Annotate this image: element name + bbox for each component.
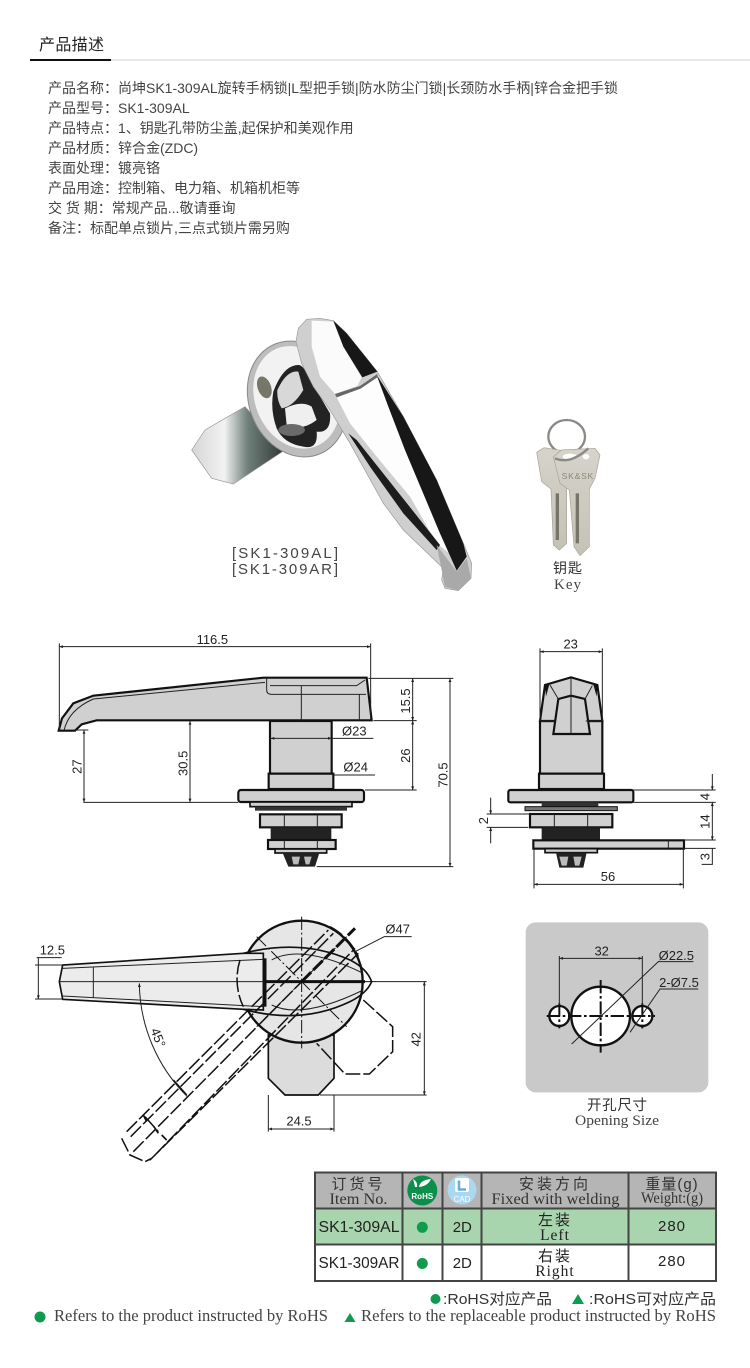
- product specification text block: 产品特点：1、钥匙孔带防尘盖,起保护和美观作用: [48, 120, 354, 136]
- icon: RoHS badge: [407, 1176, 437, 1206]
- opening size caption: [575, 1097, 659, 1129]
- product specification text block: 备注：标配单点锁片,三点式锁片需另购: [48, 220, 290, 236]
- table header labels: Weight:(g): [641, 1190, 703, 1207]
- panel: opening size diagram: 2-Ø7.5: [659, 975, 699, 990]
- table header labels: Item No.: [330, 1191, 388, 1208]
- photo: keys on ring: [537, 420, 600, 556]
- table row: SK1-309AL: [318, 1212, 686, 1244]
- icon: RoHS badge: RoHS: [411, 1192, 434, 1201]
- drawing: side view with dimensions: 14: [697, 814, 712, 829]
- drawing: front view with dimensions: 30.5: [175, 751, 190, 776]
- product specification text block: 产品材质：锌合金(ZDC): [48, 140, 198, 156]
- table row: SK1-309AR: 2D: [453, 1255, 472, 1272]
- drawing: top view with 45 degree rotation: 42: [409, 1032, 424, 1047]
- table header labels: 重量(g): [645, 1176, 699, 1193]
- table row: SK1-309AL: 280: [658, 1218, 686, 1235]
- drawing: top view with 45 degree rotation: [35, 917, 427, 1162]
- legend: RoHS symbols in English: Refers to the replaceable product instructed by RoHS: [361, 1306, 716, 1325]
- table: order information: [315, 1172, 716, 1281]
- opening size caption: Opening Size: [575, 1113, 659, 1129]
- drawing: side view with dimensions: 3: [697, 853, 712, 860]
- drawing: top view with 45 degree rotation: 45°: [148, 1026, 169, 1050]
- product specification text block: 表面处理：镀亮铬: [48, 160, 160, 176]
- legend: RoHS symbols in Chinese: [430, 1290, 716, 1308]
- table row: SK1-309AR: 右装: [538, 1248, 572, 1265]
- legend: RoHS symbols in English: Refers to the product instructed by RoHS: [54, 1306, 328, 1325]
- panel: opening size diagram: [526, 922, 708, 1092]
- photo: keys on ring: SK&SK: [562, 471, 594, 481]
- panel: opening size diagram: Ø22.5: [659, 948, 694, 963]
- drawing: front view with dimensions: 27: [69, 759, 84, 774]
- drawing: top view with 45 degree rotation: Ø47: [385, 922, 410, 937]
- drawing: side view with dimensions: 56: [601, 869, 615, 884]
- drawing: top view with 45 degree rotation: 24.5: [286, 1114, 312, 1129]
- drawing: front view with dimensions: [59, 632, 453, 867]
- product specification text block: 产品型号：SK1-309AL: [48, 100, 190, 116]
- drawing: side view with dimensions: [476, 637, 716, 888]
- table row: SK1-309AL: SK1-309AL: [318, 1219, 400, 1236]
- panel: opening size diagram: 32: [594, 944, 609, 959]
- table row: SK1-309AR: Right: [535, 1263, 575, 1280]
- table header labels: [330, 1176, 703, 1208]
- drawing: front view with dimensions: 15.5: [398, 688, 413, 714]
- drawing: side view with dimensions: 4: [697, 793, 712, 800]
- drawing: side view with dimensions: 2: [476, 817, 491, 824]
- drawing: front view with dimensions: 116.5: [197, 632, 228, 647]
- drawing: front view with dimensions: 26: [398, 748, 413, 763]
- drawing: side view with dimensions: 23: [563, 637, 578, 652]
- table row: SK1-309AR: [318, 1248, 686, 1280]
- table row: SK1-309AL: 左装: [538, 1212, 572, 1229]
- icon: CAD badge: CAD: [454, 1195, 471, 1204]
- key caption: [553, 560, 583, 593]
- section heading: product description: 产品描述: [39, 36, 104, 54]
- product photo: chrome L-handle lock: [192, 318, 472, 591]
- legend: RoHS symbols in Chinese: :RoHS可对应产品: [589, 1290, 716, 1308]
- product specification text block: 产品用途：控制箱、电力箱、机箱机柜等: [48, 180, 300, 196]
- table row: SK1-309AL: Left: [540, 1227, 570, 1244]
- legend: RoHS symbols in English: [34, 1306, 716, 1325]
- product specification text block: 产品名称：尚坤SK1-309AL旋转手柄锁|L型把手锁|防水防尘门锁|长颈防水手柄|锌合金把手锁: [48, 80, 618, 96]
- drawing: front view with dimensions: Ø24: [343, 760, 368, 775]
- model labels: [SK1-309AR]: [232, 561, 338, 578]
- model labels: [SK1-309AL]: [232, 545, 338, 562]
- table row: SK1-309AR: 280: [658, 1253, 686, 1270]
- key caption: 钥匙: [553, 560, 583, 576]
- model labels: [232, 545, 338, 578]
- product specification text block: [48, 80, 618, 236]
- opening size caption: 开孔尺寸: [587, 1097, 647, 1114]
- drawing: front view with dimensions: 70.5: [435, 762, 450, 788]
- table header labels: 订货号: [331, 1176, 386, 1193]
- key caption: Key: [554, 577, 582, 593]
- legend: RoHS symbols in Chinese: :RoHS对应产品: [443, 1290, 552, 1308]
- drawing: front view with dimensions: Ø23: [342, 723, 367, 738]
- table row: SK1-309AR: SK1-309AR: [318, 1255, 400, 1272]
- table header labels: Fixed with welding: [492, 1191, 620, 1208]
- drawing: top view with 45 degree rotation: 12.5: [40, 943, 65, 958]
- table header labels: 安装方向: [519, 1176, 591, 1193]
- table row: SK1-309AL: 2D: [453, 1219, 472, 1236]
- product specification text block: 交 货 期：常规产品...敬请垂询: [48, 200, 235, 216]
- icon: CAD badge: [448, 1176, 476, 1204]
